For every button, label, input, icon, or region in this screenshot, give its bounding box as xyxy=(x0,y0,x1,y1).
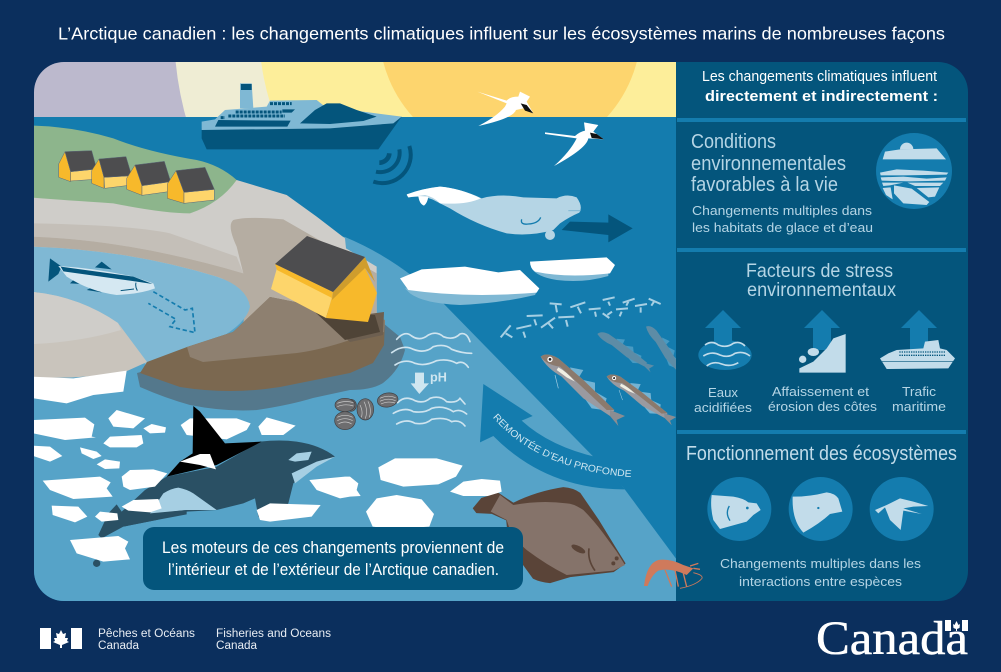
labels: stress factors xyxy=(694,385,946,415)
acidified water waves xyxy=(392,333,472,426)
mud slump xyxy=(137,297,405,410)
salmon with dashed migration arrow xyxy=(48,258,195,333)
panel: right column xyxy=(676,62,968,601)
lagoon xyxy=(33,247,250,367)
footer: department signature: Pêches et Océans xyxy=(98,628,195,640)
section: conditions xyxy=(691,131,873,235)
arrow: dashed xyxy=(148,292,195,333)
fish: cod xyxy=(606,374,676,426)
title: L’Arctique canadien : les changements climatiques influent sur les écosystèmes marins de nombreuses façons xyxy=(58,24,945,44)
panel heading: directement et indirectement : xyxy=(705,89,938,105)
icon: underwater noise xyxy=(373,146,411,183)
sky xyxy=(34,62,676,117)
clams xyxy=(335,391,399,430)
upwelling label: REMONTÉE D’EAU PROFONDE xyxy=(493,414,632,477)
labels: stress factors: Affaissement et xyxy=(772,385,870,399)
sea ice behind orca xyxy=(181,418,251,439)
icon: beluga head xyxy=(789,477,853,541)
arrow: deep water upwelling xyxy=(480,384,625,489)
green hill xyxy=(33,126,237,213)
houses on the hill xyxy=(59,151,214,203)
land: shoreline xyxy=(33,126,377,367)
arrows: increase xyxy=(705,310,937,350)
labels: stress factors: acidifiées xyxy=(694,401,752,415)
shallow shelf water xyxy=(34,236,676,601)
orca and sea ice xyxy=(33,371,361,567)
section heading: stress factors: environnementaux xyxy=(747,279,896,301)
labels: stress factors: Trafic xyxy=(902,385,936,399)
panel heading: Les changements climatiques influent xyxy=(702,69,937,85)
section: conditions: Changements multiples dans xyxy=(692,203,873,218)
labels: stress factors: érosion des côtes xyxy=(768,400,877,414)
cod fish group xyxy=(540,326,676,426)
callout xyxy=(143,527,523,590)
footer: department signature xyxy=(40,628,331,652)
callout: Les moteurs de ces changements proviennent de xyxy=(162,539,504,557)
text: species interactions: Changements multiples dans les xyxy=(720,556,922,571)
fish: distant cod xyxy=(598,332,654,372)
icon: acidified water xyxy=(698,340,752,370)
section heading: stress factors xyxy=(746,260,896,301)
text: species interactions xyxy=(720,556,922,589)
sea ice floes, centre xyxy=(366,458,502,529)
cruise ship xyxy=(202,83,402,149)
shrimp xyxy=(644,560,702,588)
text: species interactions: interactions entre espèces xyxy=(739,574,903,589)
section: conditions: favorables à la vie xyxy=(691,174,838,196)
krill swarm xyxy=(501,297,661,338)
labels: stress factors: maritime xyxy=(892,400,946,414)
birds: Arctic terns xyxy=(477,92,604,166)
section: conditions: les habitats de glace et d’eau xyxy=(692,220,873,235)
lower left land xyxy=(34,292,147,378)
fish: cod xyxy=(541,355,625,426)
beluga whale with movement arrow xyxy=(407,187,633,242)
callout: l’intérieur et de l’extérieur de l’Arctique canadien. xyxy=(168,561,499,579)
fish: distant cod xyxy=(646,326,676,370)
icon: ship xyxy=(880,340,955,369)
footer: Canada wordmark: Canada xyxy=(816,612,968,665)
labels: stress factors: Eaux xyxy=(708,386,739,400)
footer: department signature: Fisheries and Oceans xyxy=(216,628,331,640)
panel: marine scene xyxy=(34,62,676,601)
collapsing house xyxy=(271,236,377,322)
icon: bird xyxy=(870,477,934,541)
sea xyxy=(34,117,684,607)
footer: department signature: Canada xyxy=(98,640,140,652)
icon: sea ice habitat xyxy=(876,133,952,209)
icon: coastal erosion xyxy=(799,334,846,373)
footer: department signature: Canada xyxy=(216,640,258,652)
floating ice near beluga xyxy=(400,257,615,305)
arrow: direction of displacement xyxy=(562,214,633,242)
section: conditions: environnementales xyxy=(691,153,846,175)
halibut xyxy=(473,488,625,583)
arrow: pH falling xyxy=(411,373,429,394)
icon: salmon head xyxy=(707,477,771,541)
section: conditions: Conditions xyxy=(691,131,776,153)
section heading: stress factors: Facteurs de stress xyxy=(746,260,893,282)
pH label: pH xyxy=(430,371,447,385)
sea ice floes xyxy=(33,371,361,562)
icon: Canadian flag xyxy=(40,628,82,649)
section heading: ecosystem functioning: Fonctionnement des écosystèmes xyxy=(686,443,957,465)
panel heading xyxy=(702,69,938,105)
orca xyxy=(93,406,335,567)
